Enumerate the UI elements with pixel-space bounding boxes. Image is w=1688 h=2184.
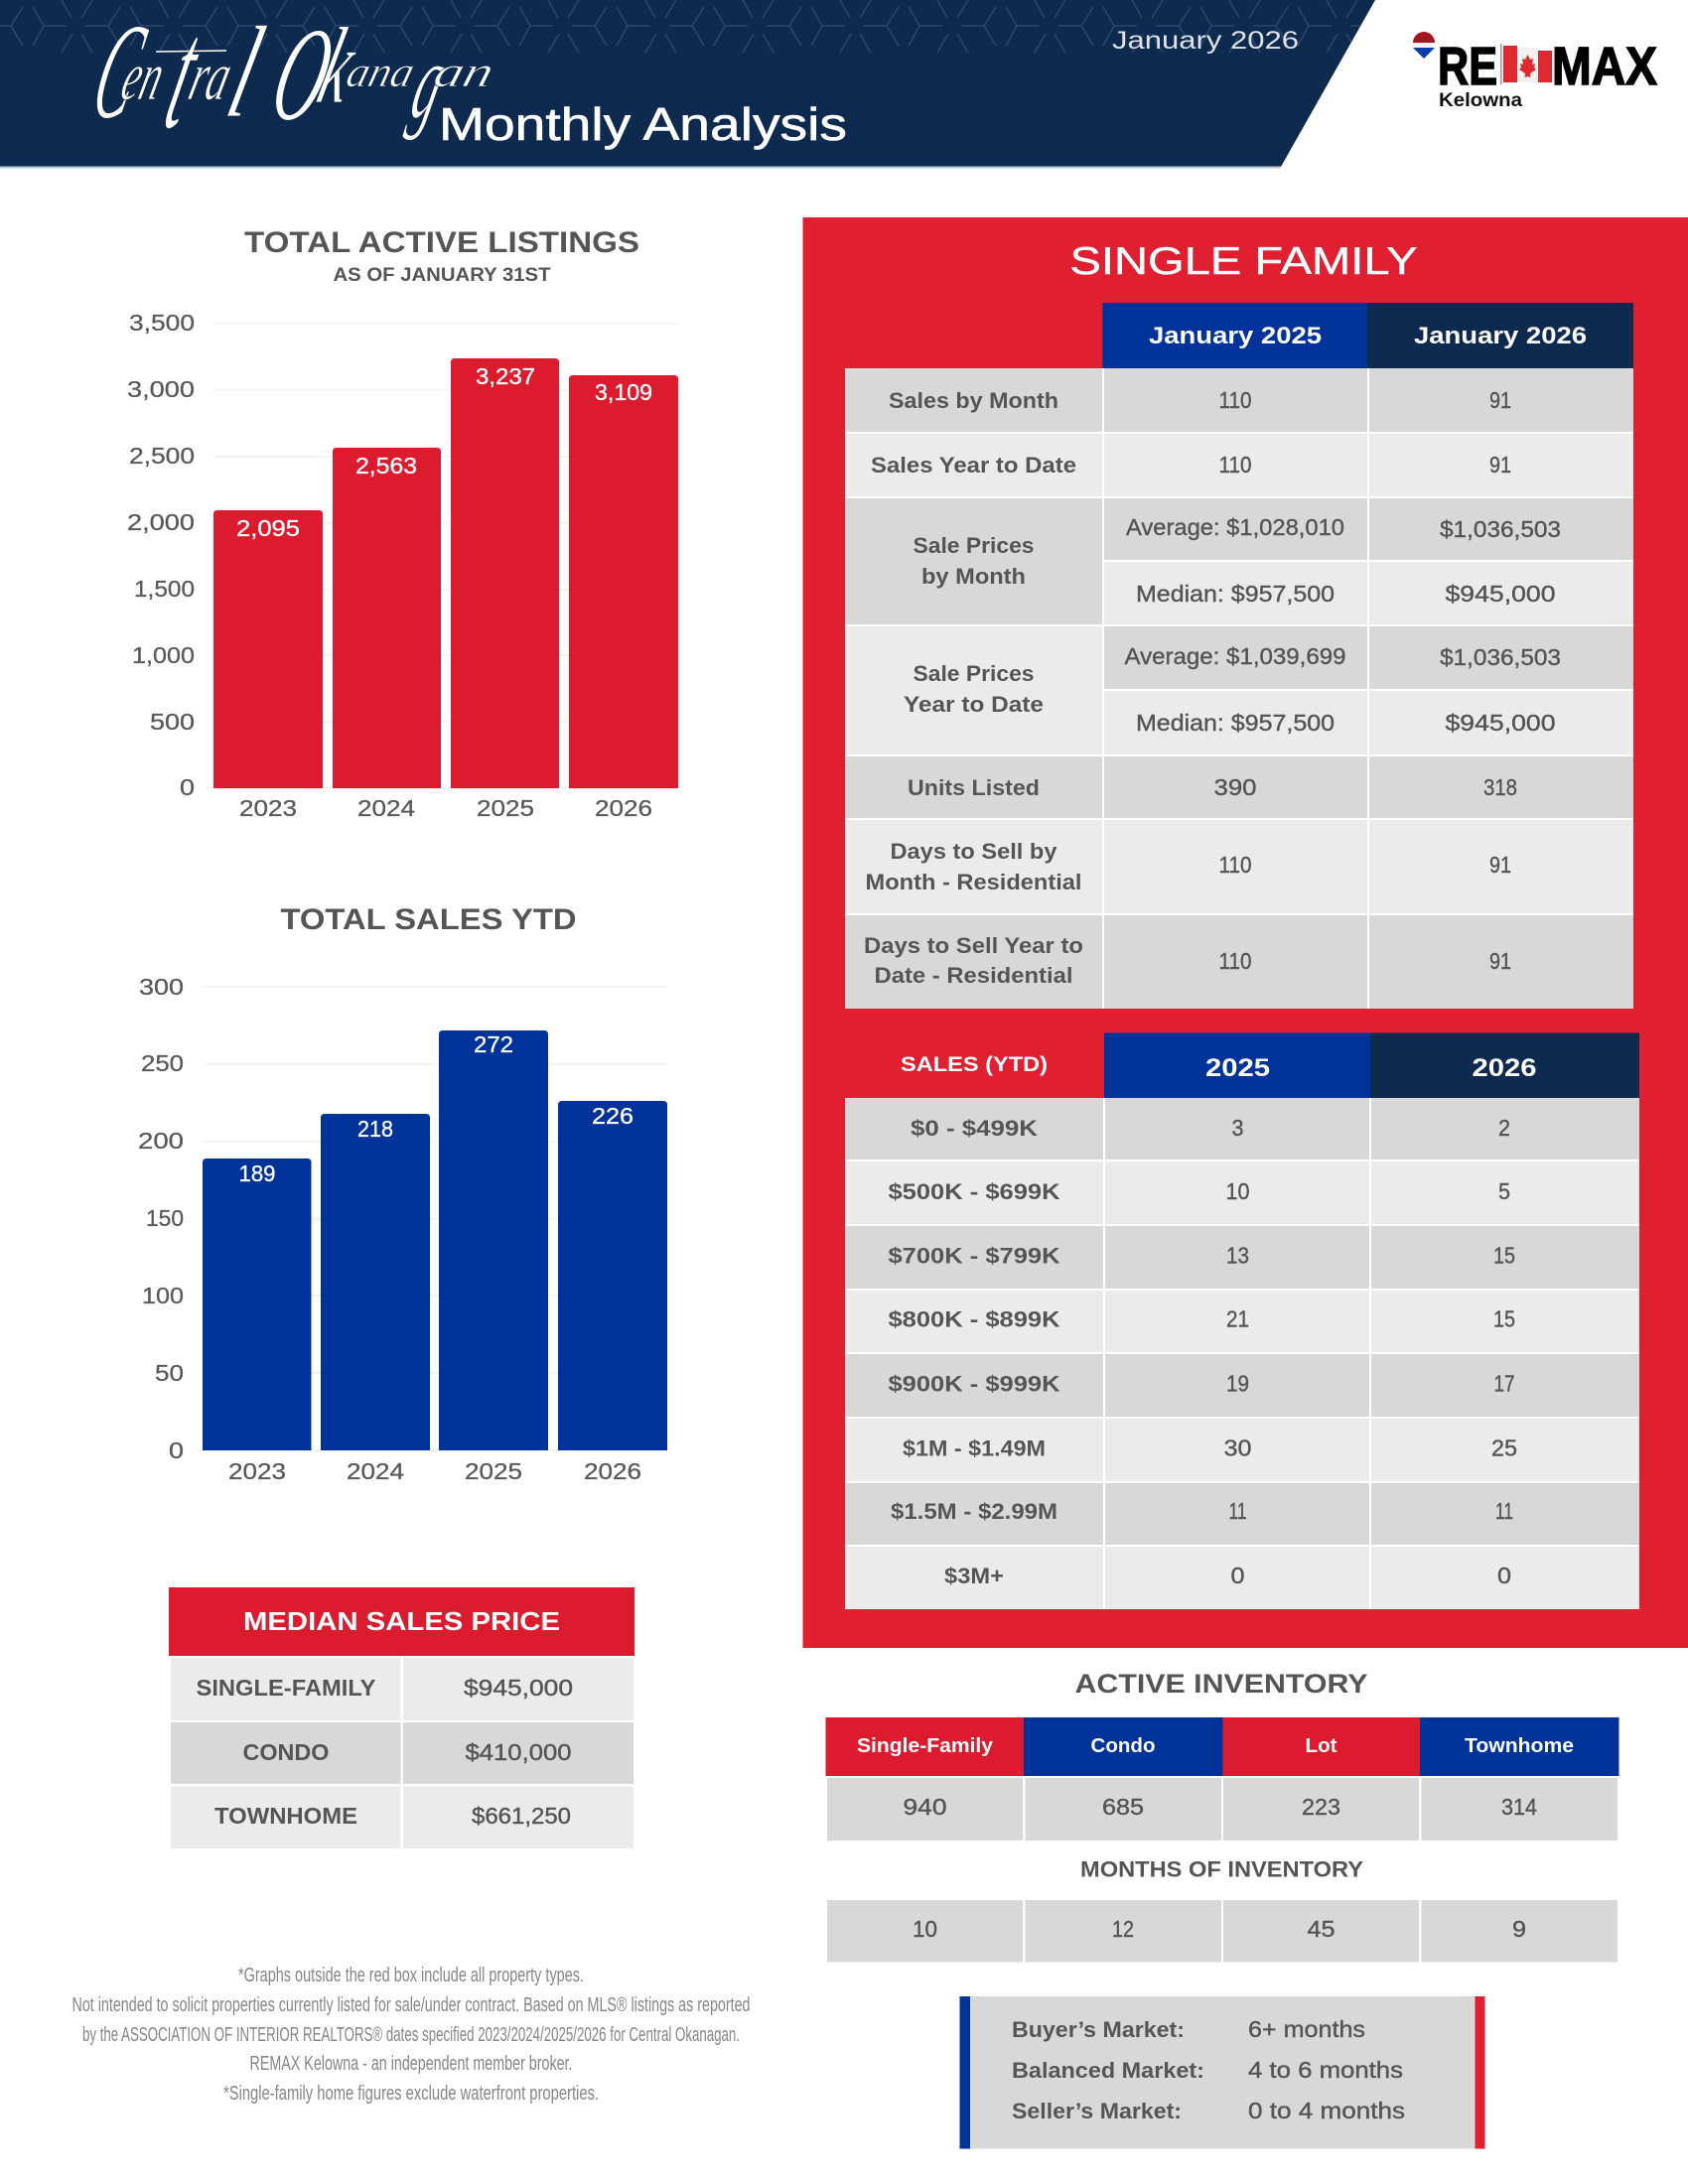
bar 2025: 3,237 <box>476 363 535 389</box>
bar 2024: 2024 <box>347 1458 404 1484</box>
row: $800K - $899K <box>845 1291 1639 1352</box>
row: $700K - $799K: $700K - $799K <box>888 1243 1060 1269</box>
buyer's market <box>1012 2016 1365 2042</box>
y axis labels: 500 <box>150 709 195 735</box>
row: $500K - $699K <box>845 1161 1639 1224</box>
y axis labels: 0 <box>180 774 195 800</box>
column: townhome <box>1420 1717 1618 1841</box>
y axis labels: 300 <box>139 974 184 1000</box>
table: months of inventory <box>827 1900 1618 1962</box>
column: townhome: 314 <box>1501 1794 1537 1820</box>
column header: January 2025 <box>1102 303 1367 368</box>
row: $3M+: 0 <box>1231 1563 1245 1588</box>
row: $1.5M - $2.99M <box>845 1483 1639 1545</box>
script title: ra <box>182 39 240 115</box>
row: $500K - $699K: $500K - $699K <box>888 1179 1060 1204</box>
table: months of inventory: 10 <box>913 1916 937 1942</box>
row: sales by month: 110 <box>1219 387 1251 413</box>
table: months of inventory: 12 <box>1112 1916 1134 1942</box>
row: days to sell year to date: Days to Sell Year to <box>864 933 1083 958</box>
icon: balloon <box>1413 32 1435 59</box>
row: single-family: $945,000 <box>464 1675 573 1701</box>
y axis labels: 150 <box>146 1205 184 1231</box>
row: $0 - $499K: 3 <box>1231 1115 1243 1141</box>
bar chart: total sales ytd <box>138 974 667 1484</box>
column: lot: 223 <box>1302 1794 1340 1820</box>
row: sale prices year to date <box>845 626 1633 754</box>
bar 2026: 3,109 <box>595 379 652 405</box>
row: days to sell year to date <box>845 915 1633 1009</box>
row: sales by month: Sales by Month <box>889 388 1058 413</box>
y axis labels <box>127 310 195 800</box>
script title: en <box>114 39 173 115</box>
footnotes: REMAX Kelowna - an independent member broker. <box>250 2053 572 2075</box>
bar 2026 <box>569 375 678 821</box>
script title: an <box>429 48 499 96</box>
row: $1.5M - $2.99M: 11 <box>1495 1498 1513 1524</box>
logo: RE/MAX Kelowna <box>1413 32 1657 111</box>
row: days to sell by month: 91 <box>1489 852 1511 878</box>
label: sales ytd: SALES (YTD) <box>901 1053 1048 1076</box>
y axis labels: 1,500 <box>134 576 195 602</box>
y axis labels: 3,000 <box>127 376 195 402</box>
column header: 2026: 2026 <box>1472 1054 1537 1082</box>
row: sale prices year to date: $945,000 <box>1446 710 1555 736</box>
column header: 2025: 2025 <box>1205 1054 1270 1082</box>
bar 2023 <box>213 510 323 821</box>
logo sublabel: Kelowna <box>1439 90 1522 111</box>
row: sale prices year to date: $1,036,503 <box>1440 644 1561 670</box>
row: sale prices year to date: Average: $1,039,699 <box>1124 643 1346 669</box>
row: $0 - $499K: $0 - $499K <box>911 1116 1038 1141</box>
row: sales year to date: Sales Year to Date <box>871 453 1076 478</box>
panel heading: SINGLE FAMILY <box>1070 240 1418 283</box>
row: $900K - $999K: $900K - $999K <box>888 1372 1060 1396</box>
y axis labels: 100 <box>142 1283 184 1308</box>
row: sale prices year to date: Sale Prices <box>914 661 1035 686</box>
column: lot <box>1223 1717 1420 1841</box>
row: $1M - $1.49M: $1M - $1.49M <box>903 1435 1046 1461</box>
column header: 2026 <box>1370 1032 1639 1098</box>
panel: median sales price <box>169 1587 634 1848</box>
column: single-family <box>826 1717 1024 1841</box>
table: months of inventory: 45 <box>1307 1916 1335 1942</box>
row: $700K - $799K: 13 <box>1226 1243 1249 1269</box>
footnotes: *Graphs outside the red box include all property types. <box>238 1965 584 1986</box>
bar 2024: 218 <box>357 1116 393 1142</box>
row: $1M - $1.49M <box>845 1419 1639 1481</box>
callout: market definitions <box>959 1996 1485 2148</box>
row: $3M+: 0 <box>1497 1563 1511 1588</box>
row: sale prices by month: $945,000 <box>1446 581 1555 607</box>
row: $500K - $699K: 5 <box>1498 1178 1510 1204</box>
row: sale prices year to date: Year to Date <box>904 692 1044 717</box>
bar 2025: 2025 <box>465 1458 522 1484</box>
row: $0 - $499K: 2 <box>1498 1115 1510 1141</box>
buyer's market: 6+ months <box>1248 2016 1365 2042</box>
column: condo: 685 <box>1102 1794 1144 1820</box>
row: units listed: 390 <box>1213 774 1257 800</box>
buyer's market: Buyer’s Market: <box>1012 2017 1185 2042</box>
row: days to sell year to date: 91 <box>1489 948 1511 974</box>
row: units listed: Units Listed <box>908 775 1040 800</box>
table: active inventory <box>826 1717 1618 1841</box>
bar 2023: 2023 <box>239 795 297 821</box>
balanced market: 4 to 6 months <box>1248 2057 1403 2083</box>
row: days to sell by month: Days to Sell by <box>890 839 1057 864</box>
bar 2023 <box>203 1159 312 1484</box>
logo wordmark left: RE <box>1438 37 1497 96</box>
y axis labels: 50 <box>155 1360 184 1386</box>
footnotes: *Single-family home figures exclude waterfront properties. <box>223 2083 599 2105</box>
bar 2025 <box>439 1030 548 1484</box>
row: $800K - $899K: 15 <box>1493 1306 1515 1332</box>
row: $1M - $1.49M: 25 <box>1491 1435 1517 1461</box>
row: days to sell by month: Month - Residential <box>866 870 1082 894</box>
balanced market <box>1012 2057 1403 2083</box>
table header <box>169 1587 634 1656</box>
seller's market: 0 to 4 months <box>1248 2098 1405 2123</box>
row: sales year to date: 91 <box>1489 452 1511 478</box>
table: monthly comparison <box>845 303 1633 1009</box>
logo wordmark right: MAX <box>1552 37 1657 96</box>
report date: January 2026 <box>1112 27 1299 55</box>
row: sale prices by month: by Month <box>921 564 1026 589</box>
bar 2026: 226 <box>592 1103 633 1129</box>
row: sales year to date <box>845 434 1633 496</box>
script title: O <box>258 0 348 148</box>
heading: active inventory: ACTIVE INVENTORY <box>1074 1669 1368 1699</box>
footnotes <box>71 1965 751 2105</box>
bar 2026 <box>558 1101 667 1484</box>
script title: C <box>79 0 159 147</box>
heading: total sales ytd: TOTAL SALES YTD <box>280 903 576 936</box>
row: units listed <box>845 756 1633 818</box>
row: sale prices by month: Average: $1,028,010 <box>1126 514 1344 540</box>
y axis labels <box>138 974 184 1463</box>
table: sales by price range <box>845 1032 1639 1609</box>
y axis labels: 2,000 <box>127 509 195 535</box>
bar 2025: 2025 <box>477 795 534 821</box>
row: $900K - $999K: 19 <box>1226 1370 1249 1396</box>
bar 2024: 2024 <box>357 795 415 821</box>
row: $900K - $999K <box>845 1354 1639 1417</box>
column header: January 2026: January 2026 <box>1414 323 1587 349</box>
row: days to sell by month <box>845 820 1633 913</box>
row: sales year to date: 110 <box>1219 452 1251 478</box>
bar 2024 <box>333 448 441 821</box>
bar 2024 <box>321 1114 430 1484</box>
table: months of inventory: 9 <box>1512 1916 1526 1942</box>
seller's market: Seller’s Market: <box>1012 2099 1182 2123</box>
heading: total active listings: TOTAL ACTIVE LISTINGS <box>244 226 639 259</box>
y axis labels: 2,500 <box>129 443 195 469</box>
row: $3M+ <box>845 1547 1639 1609</box>
y axis labels: 1,000 <box>132 642 195 668</box>
bar 2023: 2,095 <box>236 515 300 541</box>
y axis labels: 0 <box>169 1437 184 1463</box>
panel: single family <box>802 217 1688 1648</box>
row: days to sell year to date: Date - Residential <box>874 963 1072 988</box>
row: townhome: $661,250 <box>472 1803 571 1829</box>
column header: January 2026 <box>1367 303 1633 368</box>
icon: Canadian flag <box>1500 44 1552 84</box>
row: condo <box>171 1722 633 1784</box>
balanced market: Balanced Market: <box>1012 2058 1204 2083</box>
row: days to sell year to date: 110 <box>1219 948 1251 974</box>
y axis labels: 200 <box>138 1128 184 1154</box>
row: $1M - $1.49M: 30 <box>1223 1435 1251 1461</box>
row: $3M+: $3M+ <box>944 1564 1004 1588</box>
row: sale prices by month <box>845 498 1633 624</box>
bar 2025 <box>451 358 559 821</box>
bar 2026: 2026 <box>584 1458 641 1484</box>
y axis labels: 250 <box>141 1050 184 1076</box>
row: $700K - $799K: 15 <box>1493 1243 1515 1269</box>
row: single-family <box>171 1658 633 1720</box>
row: sale prices year to date: Median: $957,500 <box>1136 710 1335 736</box>
row: $700K - $799K <box>845 1226 1639 1289</box>
row: single-family: SINGLE-FAMILY <box>197 1675 375 1701</box>
row: condo: $410,000 <box>465 1739 572 1765</box>
row: $1.5M - $2.99M: $1.5M - $2.99M <box>891 1499 1057 1524</box>
y axis labels: 3,500 <box>129 310 195 336</box>
row: sales by month: 91 <box>1489 387 1511 413</box>
table header: MEDIAN SALES PRICE <box>243 1606 560 1636</box>
row: townhome <box>171 1787 633 1848</box>
column: condo <box>1024 1717 1223 1841</box>
heading: months of inventory: MONTHS OF INVENTORY <box>1080 1856 1363 1882</box>
seller's market <box>1012 2098 1405 2123</box>
row: $900K - $999K: 17 <box>1493 1370 1515 1396</box>
script title: ana <box>342 48 420 96</box>
row: sale prices by month: $1,036,503 <box>1440 516 1561 542</box>
report title: Monthly Analysis <box>439 98 847 150</box>
bar chart: total active listings <box>127 310 678 821</box>
row: $0 - $499K <box>845 1098 1639 1160</box>
row: $800K - $899K: $800K - $899K <box>888 1306 1060 1332</box>
bar 2026: 2026 <box>595 795 652 821</box>
bar 2025: 272 <box>474 1031 513 1057</box>
footnotes: Not intended to solicit properties currently listed for sale/under contract. Based on MLS® listings as reported <box>71 1994 751 2016</box>
row: units listed: 318 <box>1483 774 1517 800</box>
row: condo: CONDO <box>242 1739 330 1765</box>
row: sale prices by month: Median: $957,500 <box>1136 581 1335 607</box>
script title: l <box>215 0 276 145</box>
script title: g <box>401 21 459 142</box>
column: single-family: Single-Family <box>857 1735 994 1757</box>
bar 2023: 189 <box>238 1160 276 1186</box>
row: $1.5M - $2.99M: 11 <box>1229 1498 1247 1524</box>
row: $800K - $899K: 21 <box>1226 1306 1249 1332</box>
bar 2024: 2,563 <box>355 453 417 478</box>
bar 2023: 2023 <box>228 1458 286 1484</box>
row: sales by month <box>845 368 1633 432</box>
column header: 2025 <box>1104 1032 1370 1098</box>
column header: January 2025: January 2025 <box>1149 323 1322 349</box>
row: days to sell by month: 110 <box>1219 852 1251 878</box>
heading: total active listings: AS OF JANUARY 31ST <box>334 265 551 286</box>
row: $500K - $699K: 10 <box>1225 1178 1249 1204</box>
row: townhome: TOWNHOME <box>214 1803 357 1829</box>
column: condo: Condo <box>1090 1735 1156 1757</box>
script title: k <box>308 6 369 127</box>
row: sale prices by month: Sale Prices <box>914 533 1035 558</box>
column: single-family: 940 <box>904 1794 947 1820</box>
header banner <box>0 0 1390 169</box>
column: lot: Lot <box>1305 1735 1337 1757</box>
footnotes: by the ASSOCIATION OF INTERIOR REALTORS® dates specified 2023/2024/2025/2026 for Central Okanagan. <box>82 2024 740 2046</box>
column: townhome: Townhome <box>1465 1735 1574 1757</box>
heading: total active listings <box>244 226 639 286</box>
